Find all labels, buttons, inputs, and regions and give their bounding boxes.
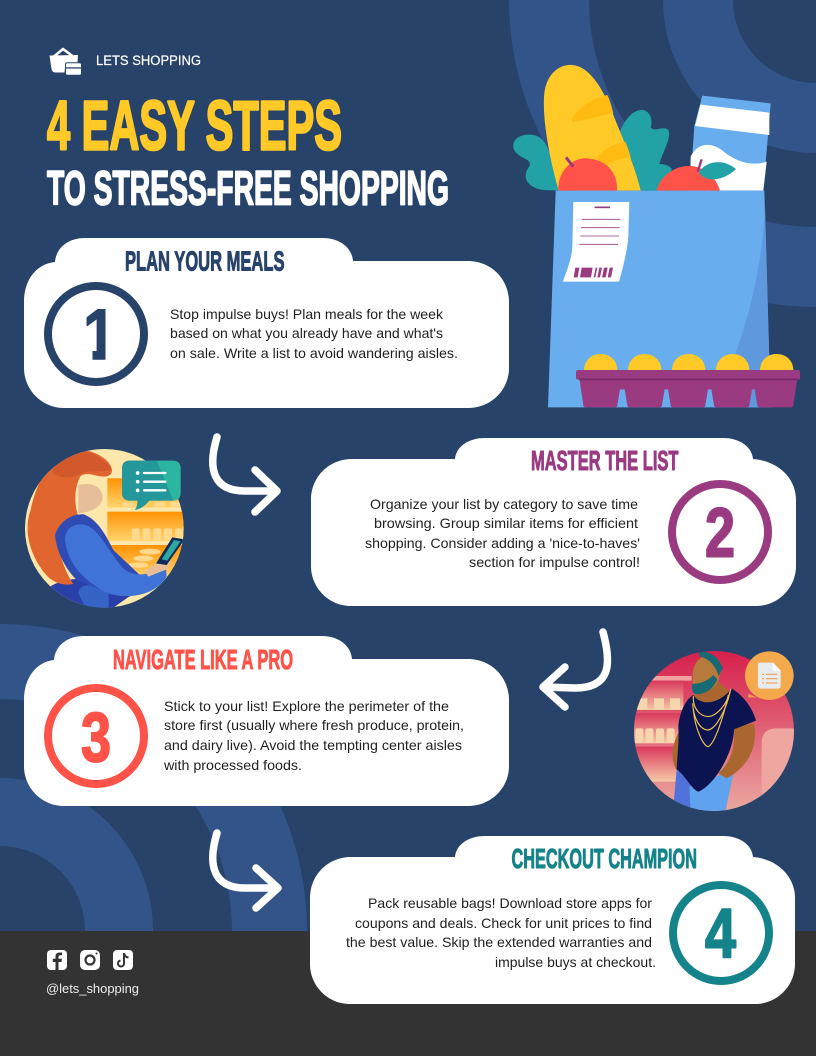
number badge: 2 bbox=[705, 494, 735, 572]
card shape bbox=[310, 836, 795, 1004]
t-shirt bbox=[677, 688, 756, 792]
description bbox=[365, 496, 640, 570]
heading: CHECKOUT CHAMPION bbox=[512, 843, 697, 874]
background arcs bottom left bbox=[0, 624, 307, 931]
document bubble bbox=[745, 651, 794, 700]
milk carton bbox=[690, 96, 771, 191]
number badge: 1 bbox=[83, 296, 117, 375]
face bbox=[78, 484, 103, 513]
right apple stem bbox=[698, 159, 702, 172]
hair bbox=[698, 652, 723, 676]
hand and phone bbox=[145, 560, 172, 577]
arrow: step 3 to step 4 bbox=[213, 833, 278, 908]
arrow: step 1 to step 2 bbox=[213, 437, 277, 512]
left leaf bbox=[513, 135, 560, 191]
baguette scores bbox=[572, 95, 613, 122]
description: store first (usually where fresh produce, protein, bbox=[164, 717, 464, 733]
title line 2: TO STRESS-FREE SHOPPING bbox=[47, 162, 449, 216]
egg carton bbox=[576, 370, 800, 407]
logo: basket icon and brand name bbox=[50, 49, 201, 75]
description: impulse buys at checkout. bbox=[495, 954, 656, 970]
lower body bbox=[50, 579, 130, 608]
icon: facebook bbox=[47, 950, 67, 970]
description: with processed foods. bbox=[163, 757, 302, 773]
illustration: man with chains bbox=[630, 651, 797, 813]
title bbox=[47, 86, 449, 216]
card 1: plan your meals bbox=[24, 238, 509, 408]
number badge: 3 bbox=[81, 698, 111, 776]
backdrop circle bbox=[25, 449, 184, 608]
heading: PLAN YOUR MEALS bbox=[125, 246, 284, 277]
number badge bbox=[673, 885, 769, 981]
description: coupons and deals. Check for unit prices to find bbox=[355, 915, 652, 931]
social handle: @lets_shopping bbox=[46, 982, 139, 996]
card shape bbox=[24, 238, 509, 408]
arms bbox=[672, 732, 679, 770]
icon: tiktok bbox=[113, 950, 133, 970]
description: Stop impulse buys! Plan meals for the week bbox=[170, 306, 444, 322]
number badge: 4 bbox=[705, 894, 736, 972]
description: and dairy live). Avoid the tempting center aisles bbox=[164, 737, 462, 753]
right leaf bbox=[617, 110, 672, 191]
receipt bbox=[563, 202, 629, 282]
torso bbox=[55, 514, 143, 597]
right apple bbox=[657, 166, 720, 191]
description: section for impulse control! bbox=[469, 554, 640, 570]
description: Pack reusable bags! Download store apps for bbox=[368, 895, 652, 911]
arrow: step 2 to step 3 bbox=[543, 632, 608, 707]
head bbox=[693, 656, 720, 692]
bag body bbox=[548, 191, 771, 407]
description bbox=[170, 306, 458, 361]
eggs bbox=[584, 354, 793, 371]
baguette bbox=[544, 65, 641, 191]
apple leaf bbox=[699, 162, 736, 179]
brand name: LETS SHOPPING bbox=[96, 53, 201, 68]
left apple bbox=[558, 158, 617, 191]
description: Stick to your list! Explore the perimeter of the bbox=[164, 698, 449, 714]
icon: basket bbox=[50, 49, 82, 75]
beard bbox=[692, 675, 717, 694]
footer band bbox=[0, 931, 816, 1056]
card 4: checkout champion bbox=[310, 836, 795, 1004]
card shape bbox=[311, 438, 796, 606]
description bbox=[163, 698, 464, 773]
title line 1: 4 EASY STEPS bbox=[47, 86, 342, 164]
description: browsing. Group similar items for efficient bbox=[374, 515, 638, 531]
number badge bbox=[48, 286, 144, 382]
social links bbox=[46, 950, 139, 996]
illustration: grocery bag bbox=[513, 65, 800, 407]
store shelves bbox=[107, 478, 187, 578]
description: the best value. Skip the extended warranties and bbox=[346, 934, 652, 950]
backdrop circle bbox=[634, 651, 794, 811]
heading: NAVIGATE LIKE A PRO bbox=[113, 644, 293, 675]
description: shopping. Consider adding a 'nice-to-haves' bbox=[365, 535, 640, 551]
arm bbox=[65, 524, 167, 596]
store shelves bbox=[634, 676, 794, 796]
bag side fold bbox=[713, 207, 771, 407]
chat bubble bbox=[122, 461, 181, 510]
description: Organize your list by category to save time bbox=[370, 496, 638, 512]
number badge bbox=[48, 688, 144, 784]
neck bbox=[694, 682, 729, 702]
card shape bbox=[24, 636, 509, 806]
left apple stem bbox=[566, 157, 573, 167]
jeans bbox=[674, 770, 692, 808]
description bbox=[346, 895, 656, 970]
icon: instagram bbox=[80, 950, 100, 970]
card 2: master the list bbox=[311, 438, 796, 606]
illustration: woman with phone bbox=[25, 449, 187, 610]
heading: MASTER THE LIST bbox=[531, 445, 679, 476]
description: on sale. Write a list to avoid wandering aisles. bbox=[170, 345, 458, 361]
background arcs top right bbox=[509, 0, 816, 307]
description: based on what you already have and what's bbox=[170, 325, 443, 341]
gold chains bbox=[693, 689, 731, 747]
hair bbox=[28, 449, 112, 585]
number badge bbox=[672, 484, 768, 580]
card 3: navigate like a pro bbox=[24, 636, 509, 806]
fridge panel bbox=[762, 728, 794, 796]
